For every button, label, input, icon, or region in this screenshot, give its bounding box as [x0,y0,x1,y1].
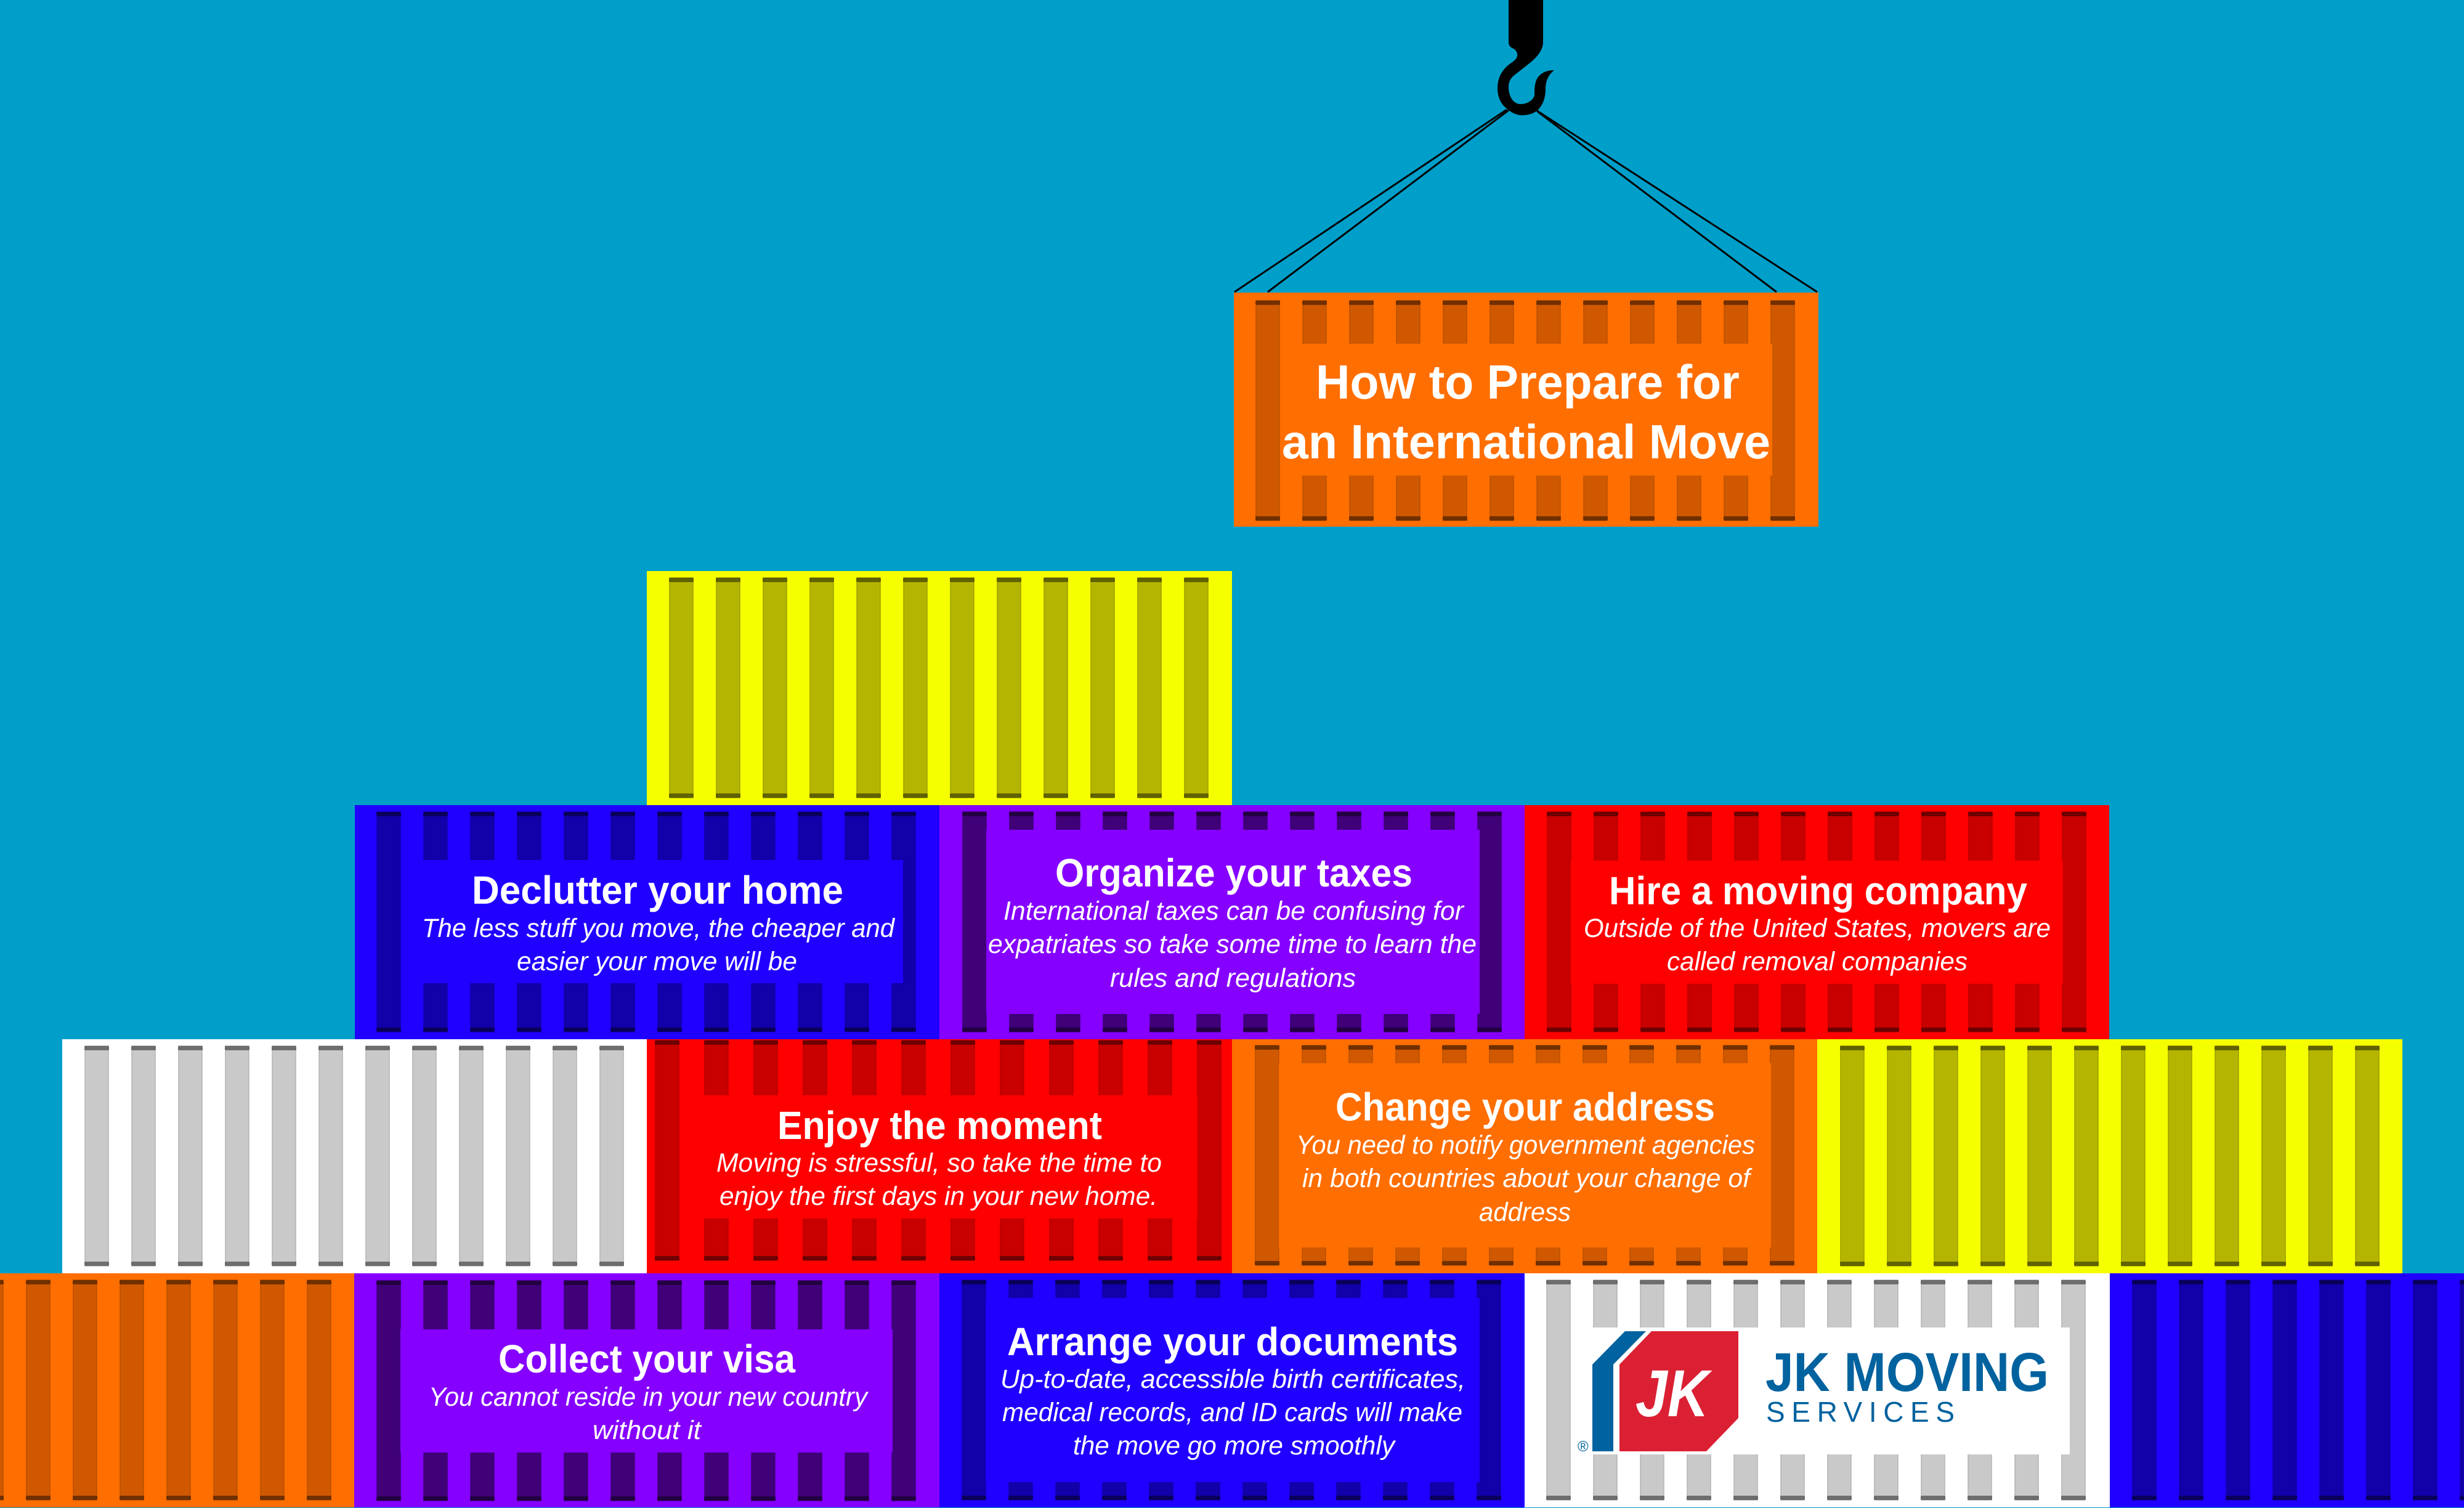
container: yellow top [647,571,1232,805]
heading: Organize your taxes [1055,851,1412,895]
container: logo [1525,1273,2110,1507]
text block: International taxes can be confusing for [1003,896,1465,926]
ropes [1234,110,1817,292]
container: enjoy [647,1039,1232,1273]
text block: rules and regulations [1110,963,1356,993]
text block: easier your move will be [517,947,797,976]
container: moving company [1525,805,2109,1039]
registered mark: ® [1578,1438,1589,1455]
heading: Arrange your documents [1007,1320,1458,1364]
logo: JK Moving Services [1578,1331,2049,1455]
title: How to Prepare for [1316,355,1740,409]
logo wordmark: JK MOVING [1765,1341,2049,1403]
heading: Hire a moving company [1609,869,2027,913]
text block: Moving is stressful, so take the time to [716,1148,1162,1178]
text block: medical records, and ID cards will make [1002,1398,1462,1427]
crane hook and ropes [1234,0,1817,292]
container: taxes [939,805,1525,1039]
text block: Up-to-date, accessible birth certificates, [1000,1364,1465,1394]
container: visa [354,1273,939,1507]
heading: Change your address [1335,1085,1715,1129]
text block [422,914,896,976]
container: yellow right [1817,1039,2402,1273]
text block: expatriates so take some time to learn the [988,930,1477,959]
container: blue right [2110,1273,2464,1507]
text block [1000,1364,1465,1461]
text block: in both countries about your change of [1302,1164,1753,1193]
text block: You need to notify government agencies [1296,1130,1755,1160]
text block [1584,914,2051,976]
text block: enjoy the first days in your new home. [719,1182,1157,1211]
text block: the move go more smoothly [1073,1431,1396,1461]
icon: crane hook [1497,0,1554,115]
heading: Declutter your home [472,868,843,912]
container: white left [62,1039,647,1273]
logo subtitle: SERVICES [1766,1396,1955,1428]
icon: blue stripe [1592,1331,1646,1451]
text block: address [1479,1198,1571,1227]
container: title [1234,293,1818,527]
container: address [1232,1039,1817,1273]
logo letters: JK [1635,1356,1712,1430]
text block: Outside of the United States, movers are [1584,914,2051,943]
title: an International Move [1282,415,1770,469]
text block: You cannot reside in your new country [429,1382,869,1412]
container: declutter [355,805,939,1039]
text block [429,1382,869,1445]
heading: Enjoy the moment [777,1103,1102,1148]
container: documents [939,1273,1525,1507]
text block: The less stuff you move, the cheaper and [422,914,896,943]
heading: Collect your visa [498,1337,795,1381]
container: orange left [0,1273,355,1507]
text block [1296,1130,1755,1227]
text block: called removal companies [1667,947,1968,976]
text block [988,896,1477,993]
text block [716,1148,1162,1211]
icon: red badge [1619,1331,1738,1451]
title [1282,355,1770,469]
text block: without it [593,1416,702,1445]
